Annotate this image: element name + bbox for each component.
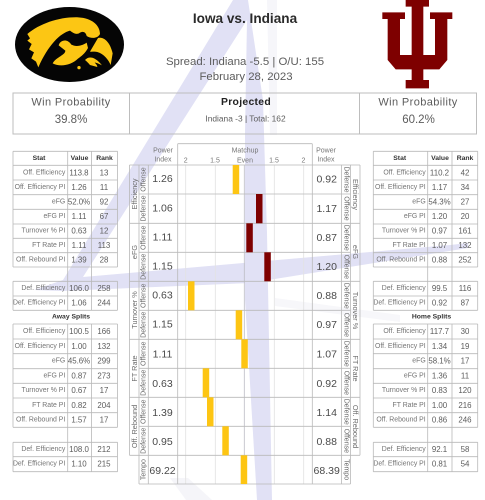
table: Iowa away splits: 0.67 bbox=[71, 386, 87, 395]
logo: Iowa Hawkeyes bbox=[15, 7, 124, 82]
table: Indiana home splits: eFG bbox=[412, 358, 426, 365]
Iowa win probability: Win Probability bbox=[31, 96, 111, 108]
table: Indiana season stats: 1.07 bbox=[432, 241, 447, 250]
table: Iowa away splits: 215 bbox=[97, 460, 111, 468]
table: Iowa away splits: 166 bbox=[97, 327, 111, 336]
right category labels: eFG bbox=[351, 245, 360, 259]
table: Indiana home splits: 117.7 bbox=[430, 327, 449, 336]
table: Indiana home splits: 0.83 bbox=[432, 386, 448, 395]
left offense and defense labels: Offense bbox=[141, 400, 148, 424]
left offense and defense labels bbox=[141, 167, 148, 480]
table: Iowa season stats: 1.11 bbox=[72, 212, 86, 221]
left Power Index header bbox=[153, 148, 174, 164]
table: Iowa season stats: Turnover % PI bbox=[22, 228, 65, 234]
table: Iowa away splits: 204 bbox=[97, 401, 111, 410]
table: Iowa season stats: 1.26 bbox=[71, 183, 87, 192]
table: Iowa away splits: 17 bbox=[100, 386, 108, 395]
table: Iowa season stats: eFG PI bbox=[43, 213, 65, 220]
table: Indiana home splits: eFG PI bbox=[404, 372, 426, 380]
table: Iowa away splits: Off. Efficiency bbox=[23, 328, 66, 335]
table: Iowa season stats: 13 bbox=[100, 168, 109, 178]
table: Indiana season stats: Off. Rebound PI bbox=[376, 256, 426, 264]
table: Indiana season stats: 0.97 bbox=[432, 226, 447, 236]
table: Indiana home splits: 0.81 bbox=[432, 460, 447, 468]
left offense and defense labels: Offense bbox=[141, 226, 148, 250]
table: Iowa away splits: Off. Rebound PI bbox=[16, 416, 65, 424]
table: Indiana home splits: 17 bbox=[461, 357, 469, 366]
left offense and defense labels: Defense bbox=[141, 312, 148, 338]
right offense and defense labels: Offense bbox=[342, 371, 350, 395]
table: Indiana season stats: Rank bbox=[457, 155, 474, 162]
table: Indiana home splits: FT Rate PI bbox=[392, 402, 426, 409]
left offense and defense labels: Offense bbox=[141, 284, 148, 308]
left category labels: Efficiency bbox=[130, 178, 139, 210]
right offense and defense labels: Offense bbox=[342, 196, 350, 221]
Iowa power index values: 0.63 bbox=[152, 290, 173, 302]
table: Iowa season stats: 258 bbox=[97, 284, 111, 293]
table: Iowa away splits: eFG bbox=[52, 358, 65, 365]
table: Iowa season stats: 113 bbox=[98, 241, 111, 250]
table: Indiana season stats: Def. Efficiency bbox=[382, 285, 426, 292]
table: Iowa season stats: Off. Rebound PI bbox=[16, 256, 65, 264]
Iowa power index values: 1.26 bbox=[152, 173, 173, 185]
Indiana power index values: 0.92 bbox=[316, 174, 337, 186]
table: Iowa away splits: 212 bbox=[97, 445, 111, 454]
Indiana power index values: 1.07 bbox=[316, 348, 337, 360]
table: Indiana season stats: 252 bbox=[458, 256, 472, 264]
Indiana win probability: Win Probability bbox=[378, 96, 458, 108]
game info: spread and date bbox=[166, 56, 324, 83]
table: Indiana home splits: 92.1 bbox=[432, 445, 447, 454]
Iowa power index values: 1.15 bbox=[152, 260, 173, 272]
table: Iowa season stats: 106.0 bbox=[69, 284, 89, 293]
logo: Indiana IU trident bbox=[382, 0, 452, 88]
table: Iowa season stats: 12 bbox=[100, 226, 108, 236]
table: Indiana home splits: 30 bbox=[461, 327, 470, 336]
Indiana power index values: 0.92 bbox=[316, 378, 337, 390]
table: Indiana home splits: 216 bbox=[458, 401, 472, 410]
table: Indiana season stats: 99.5 bbox=[432, 284, 448, 293]
table: Iowa season stats: 1.11 bbox=[72, 241, 86, 250]
left offense and defense labels: Defense bbox=[141, 370, 148, 396]
right offense and defense labels bbox=[342, 166, 350, 480]
Matchup axis header: Matchup bbox=[232, 148, 259, 154]
table: Indiana home splits: 0.86 bbox=[432, 416, 448, 424]
table: Indiana season stats: 1.20 bbox=[432, 212, 448, 221]
table: Indiana season stats: 27 bbox=[461, 198, 469, 206]
left category labels bbox=[130, 178, 139, 448]
table: Iowa season stats: Def. Efficiency bbox=[21, 285, 66, 292]
right offense and defense labels: Defense bbox=[342, 225, 350, 251]
table: Iowa away splits: Def. Efficiency PI bbox=[13, 460, 65, 468]
table: Iowa season stats: 67 bbox=[100, 212, 108, 221]
right offense and defense labels: Offense bbox=[342, 429, 350, 453]
Indiana power index values: 1.17 bbox=[316, 203, 337, 215]
table: Iowa season stats: 1.39 bbox=[71, 256, 87, 264]
Matchup axis header: 2 bbox=[302, 158, 306, 164]
table: Indiana home splits: Def. Efficiency bbox=[382, 446, 426, 453]
table: Indiana home splits: 54 bbox=[461, 460, 470, 468]
table: Indiana home splits: 246 bbox=[458, 416, 472, 424]
table: Indiana season stats: Off. Efficiency PI bbox=[375, 184, 426, 191]
table: Iowa away splits bbox=[13, 324, 118, 472]
table: Indiana season stats: 132 bbox=[458, 241, 472, 250]
table: Iowa away splits: 273 bbox=[97, 372, 111, 380]
table: Indiana season stats: 0.92 bbox=[432, 298, 447, 308]
Indiana win probability: 60.2% bbox=[402, 114, 435, 126]
left offense and defense labels: Defense bbox=[141, 428, 148, 454]
table: Iowa season stats: 1.06 bbox=[71, 298, 87, 308]
table: Iowa season stats: Rank bbox=[96, 155, 113, 162]
Indiana power index values: 0.88 bbox=[316, 436, 337, 448]
table: Iowa away splits: 100.5 bbox=[69, 327, 89, 336]
right offense and defense labels: Offense bbox=[342, 255, 350, 279]
table: Indiana season stats: eFG PI bbox=[404, 213, 426, 220]
table: Iowa season stats: Stat bbox=[33, 155, 46, 162]
left category labels: FT Rate bbox=[130, 355, 139, 382]
table: Indiana season stats: 1.17 bbox=[432, 183, 447, 192]
table: Iowa season stats: 244 bbox=[97, 298, 111, 308]
Iowa power index values: 1.11 bbox=[153, 348, 172, 360]
right Power Index header: Index bbox=[317, 156, 335, 164]
table: Indiana home splits: Off. Rebound PI bbox=[376, 416, 426, 424]
table: Indiana season stats: 161 bbox=[458, 226, 472, 236]
table: Iowa season stats: 11 bbox=[100, 183, 108, 192]
table: Iowa away splits: Def. Efficiency bbox=[21, 446, 66, 453]
Iowa power index values: 1.15 bbox=[152, 319, 173, 331]
Iowa power index values bbox=[149, 173, 176, 477]
table: Iowa away splits: 1.10 bbox=[71, 460, 87, 468]
table: Iowa away splits: eFG PI bbox=[43, 372, 65, 380]
table: Iowa away splits: FT Rate PI bbox=[32, 402, 65, 409]
table: Indiana home splits: Turnover % PI bbox=[382, 387, 426, 394]
table: Iowa away splits: 1.57 bbox=[71, 416, 87, 424]
table: Indiana home splits: 58.1% bbox=[428, 357, 451, 366]
table: Iowa season stats bbox=[13, 151, 118, 310]
table: Indiana season stats: Stat bbox=[393, 155, 407, 162]
chart gridlines bbox=[186, 165, 304, 484]
table: Indiana home splits bbox=[373, 324, 478, 472]
table: Indiana season stats: Def. Efficiency PI bbox=[373, 300, 426, 306]
table: Iowa season stats: Off. Efficiency PI bbox=[15, 184, 65, 191]
left Power Index header: Power bbox=[153, 148, 174, 154]
Indiana power index values: 0.87 bbox=[316, 232, 337, 244]
table: Iowa away splits: 1.00 bbox=[71, 342, 87, 351]
table: Iowa away splits: 45.6% bbox=[68, 357, 90, 366]
table: Indiana season stats: eFG bbox=[412, 198, 426, 206]
projected line: Indiana -3 | Total: 162 bbox=[205, 114, 286, 124]
table: Indiana home splits: 19 bbox=[461, 342, 470, 351]
table: Indiana home splits: Off. Efficiency bbox=[383, 328, 426, 335]
left offense and defense labels: Offense bbox=[141, 342, 148, 366]
table: Indiana season stats bbox=[373, 151, 478, 310]
table: Indiana home splits: 11 bbox=[461, 372, 469, 380]
right offense and defense labels: Tempo bbox=[342, 459, 350, 480]
table: Indiana home splits: 1.36 bbox=[432, 372, 448, 380]
right category labels bbox=[351, 179, 360, 448]
Matchup axis header: 2 bbox=[184, 158, 188, 164]
table: Iowa season stats: eFG bbox=[52, 198, 65, 206]
table: Iowa season stats: Value bbox=[71, 155, 89, 162]
table: Iowa away splits: 299 bbox=[97, 357, 111, 366]
table: Iowa away splits: 17 bbox=[100, 416, 108, 424]
table: Iowa away splits: Off. Efficiency PI bbox=[15, 343, 65, 350]
table: Iowa season stats: 113.8 bbox=[69, 168, 89, 178]
right Power Index header bbox=[316, 148, 337, 164]
left offense and defense labels: Offense bbox=[141, 167, 148, 192]
right category labels: Efficiency bbox=[351, 179, 360, 210]
right Power Index header: Power bbox=[316, 148, 337, 154]
Indiana power index values bbox=[314, 174, 340, 477]
table: Iowa away splits: 108.0 bbox=[69, 445, 89, 454]
right offense and defense labels: Defense bbox=[342, 341, 350, 367]
game info: spread and date: February 28, 2023 bbox=[199, 71, 293, 83]
table: Iowa season stats: 52.0% bbox=[68, 198, 90, 206]
left Power Index header: Index bbox=[154, 156, 172, 164]
left offense and defense labels: Defense bbox=[141, 254, 148, 280]
table: Indiana season stats: 34 bbox=[461, 183, 470, 192]
table: Indiana home splits: Off. Efficiency PI bbox=[375, 343, 426, 350]
table: Indiana season stats: 110.2 bbox=[430, 168, 449, 178]
right offense and defense labels: Defense bbox=[342, 399, 350, 425]
right category labels: Turnover % bbox=[351, 292, 360, 330]
Indiana win probability bbox=[378, 96, 458, 126]
heading: Away Splits: Away Splits bbox=[52, 314, 90, 320]
Iowa win probability bbox=[31, 96, 111, 126]
Indiana power index values: 68.39 bbox=[314, 465, 340, 477]
Indiana power index values: 0.88 bbox=[316, 290, 337, 302]
title: Iowa vs. Indiana bbox=[193, 11, 298, 26]
Iowa power index values: 69.22 bbox=[149, 465, 176, 477]
right category labels: FT Rate bbox=[351, 355, 360, 382]
Matchup axis header bbox=[184, 148, 306, 164]
table: Indiana home splits: 1.00 bbox=[432, 401, 448, 410]
table: Indiana home splits: 120 bbox=[458, 386, 472, 395]
left category labels: eFG bbox=[130, 245, 139, 259]
table: Iowa away splits: 0.87 bbox=[71, 372, 87, 380]
table: Iowa season stats: 28 bbox=[100, 256, 109, 264]
Indiana power index values: 1.20 bbox=[316, 261, 337, 273]
table: Indiana home splits: Def. Efficiency PI bbox=[373, 460, 426, 468]
table: Indiana season stats: Value bbox=[431, 155, 449, 162]
table: Indiana home splits: 58 bbox=[461, 445, 470, 454]
right offense and defense labels: Offense bbox=[342, 313, 350, 337]
right offense and defense labels: Defense bbox=[342, 166, 350, 193]
left category labels: Off. Rebound bbox=[130, 405, 139, 448]
Matchup axis header: 1.5 bbox=[210, 158, 220, 164]
matchup bars bbox=[188, 165, 271, 484]
table: Indiana home splits: 1.34 bbox=[432, 342, 448, 351]
table: Iowa away splits: Turnover % PI bbox=[22, 387, 65, 394]
left category labels: Turnover % bbox=[130, 291, 139, 329]
table: Iowa season stats: Def. Efficiency PI bbox=[13, 300, 65, 306]
projected line: Projected bbox=[221, 97, 271, 108]
projected line bbox=[205, 97, 286, 124]
table: Indiana season stats: Off. Efficiency bbox=[383, 170, 426, 176]
table: Iowa away splits: 0.82 bbox=[71, 401, 87, 410]
Iowa power index values: 0.63 bbox=[152, 378, 173, 390]
left offense and defense labels: Tempo bbox=[141, 459, 148, 480]
table: Iowa season stats: FT Rate PI bbox=[32, 242, 65, 249]
Iowa power index values: 1.39 bbox=[152, 407, 173, 419]
heading: Home Splits: Home Splits bbox=[412, 314, 451, 320]
chart: matchup power index bbox=[130, 144, 360, 484]
left offense and defense labels: Defense bbox=[141, 195, 148, 222]
Indiana power index values: 0.97 bbox=[316, 319, 337, 331]
panel: projection summary bbox=[13, 93, 476, 134]
table: Indiana season stats: 42 bbox=[461, 168, 469, 178]
table: Indiana season stats: 20 bbox=[461, 212, 470, 221]
table: Iowa season stats: Off. Efficiency bbox=[23, 170, 66, 176]
Iowa win probability: 39.8% bbox=[55, 114, 87, 126]
table: Iowa season stats: 92 bbox=[100, 198, 108, 206]
Indiana power index values: 1.14 bbox=[316, 407, 337, 419]
right category labels: Off. Rebound bbox=[351, 405, 360, 448]
Matchup axis header: Even bbox=[237, 158, 253, 164]
table: Indiana season stats: 116 bbox=[459, 284, 472, 293]
table: Indiana season stats: Turnover % PI bbox=[382, 228, 426, 234]
right offense and defense labels: Defense bbox=[342, 283, 350, 309]
Iowa power index values: 0.95 bbox=[152, 436, 173, 448]
table: Indiana season stats: FT Rate PI bbox=[392, 242, 426, 249]
Matchup axis header: 1.5 bbox=[269, 158, 279, 164]
table: Iowa season stats: 0.63 bbox=[71, 226, 87, 236]
table: Iowa away splits: 132 bbox=[97, 342, 111, 351]
Iowa power index values: 1.06 bbox=[152, 202, 173, 214]
table: Indiana season stats: 54.3% bbox=[428, 198, 451, 206]
game info: spread and date: Spread: Indiana -5.5 | O/U: 155 bbox=[166, 56, 324, 68]
table: Indiana season stats: 87 bbox=[461, 298, 469, 308]
table: Indiana season stats: 0.88 bbox=[432, 256, 448, 264]
Iowa power index values: 1.11 bbox=[153, 232, 172, 244]
